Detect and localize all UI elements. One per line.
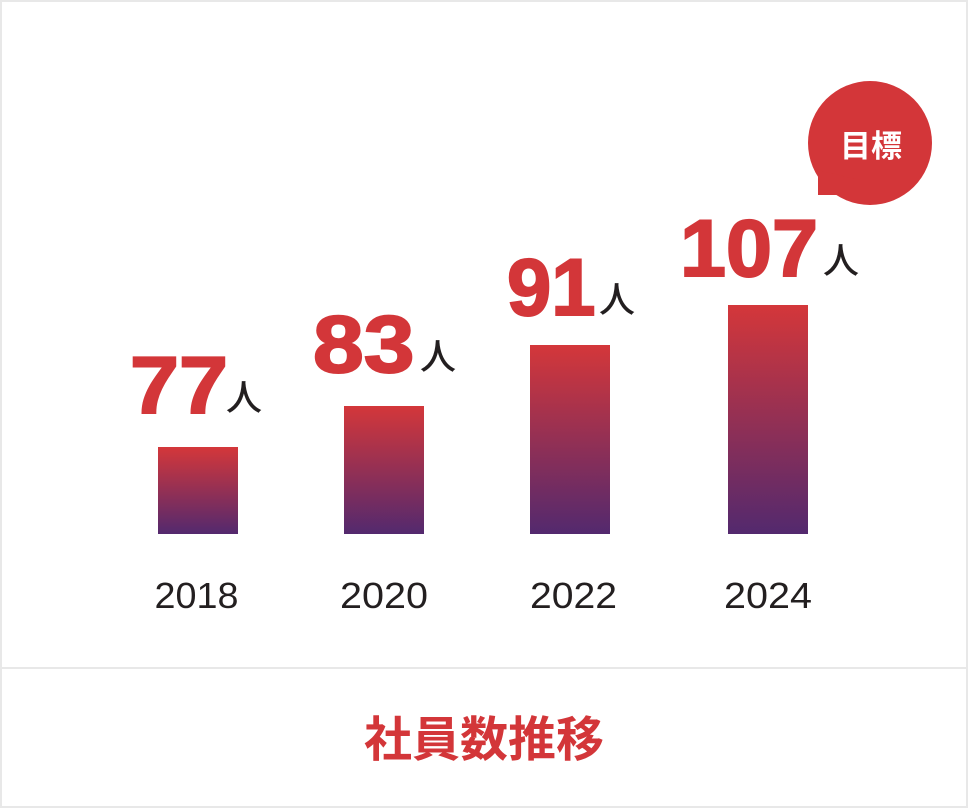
value: 77 people	[130, 341, 262, 431]
column: 2020	[313, 300, 456, 616]
value: 83 people	[313, 300, 456, 390]
value: 83 people: 人	[420, 338, 456, 377]
value: 91 people: 91	[507, 243, 596, 333]
value: 77 people: 人	[226, 379, 262, 418]
year label: 2024: 2024	[724, 575, 812, 616]
badge: target	[808, 81, 932, 205]
year label: 2020: 2020	[340, 575, 428, 616]
value: 107 people: 人	[823, 242, 859, 281]
title: 社員数推移	[364, 714, 604, 767]
bar: 2024	[728, 305, 808, 534]
bar: 2022	[530, 345, 610, 534]
year label: 2022: 2022	[530, 575, 617, 616]
value: 107 people: 107	[680, 204, 818, 294]
bar: 2020	[344, 406, 424, 534]
badge: target: 目標	[840, 129, 902, 164]
value: 83 people: 83	[313, 300, 414, 390]
column: 2022	[507, 243, 635, 616]
bar: 2018	[158, 447, 238, 534]
year label: 2018: 2018	[154, 575, 238, 616]
column: 2018	[130, 341, 262, 616]
column: 2024	[680, 204, 859, 616]
value: 91 people: 人	[599, 281, 635, 320]
value: 77 people: 77	[130, 341, 228, 431]
